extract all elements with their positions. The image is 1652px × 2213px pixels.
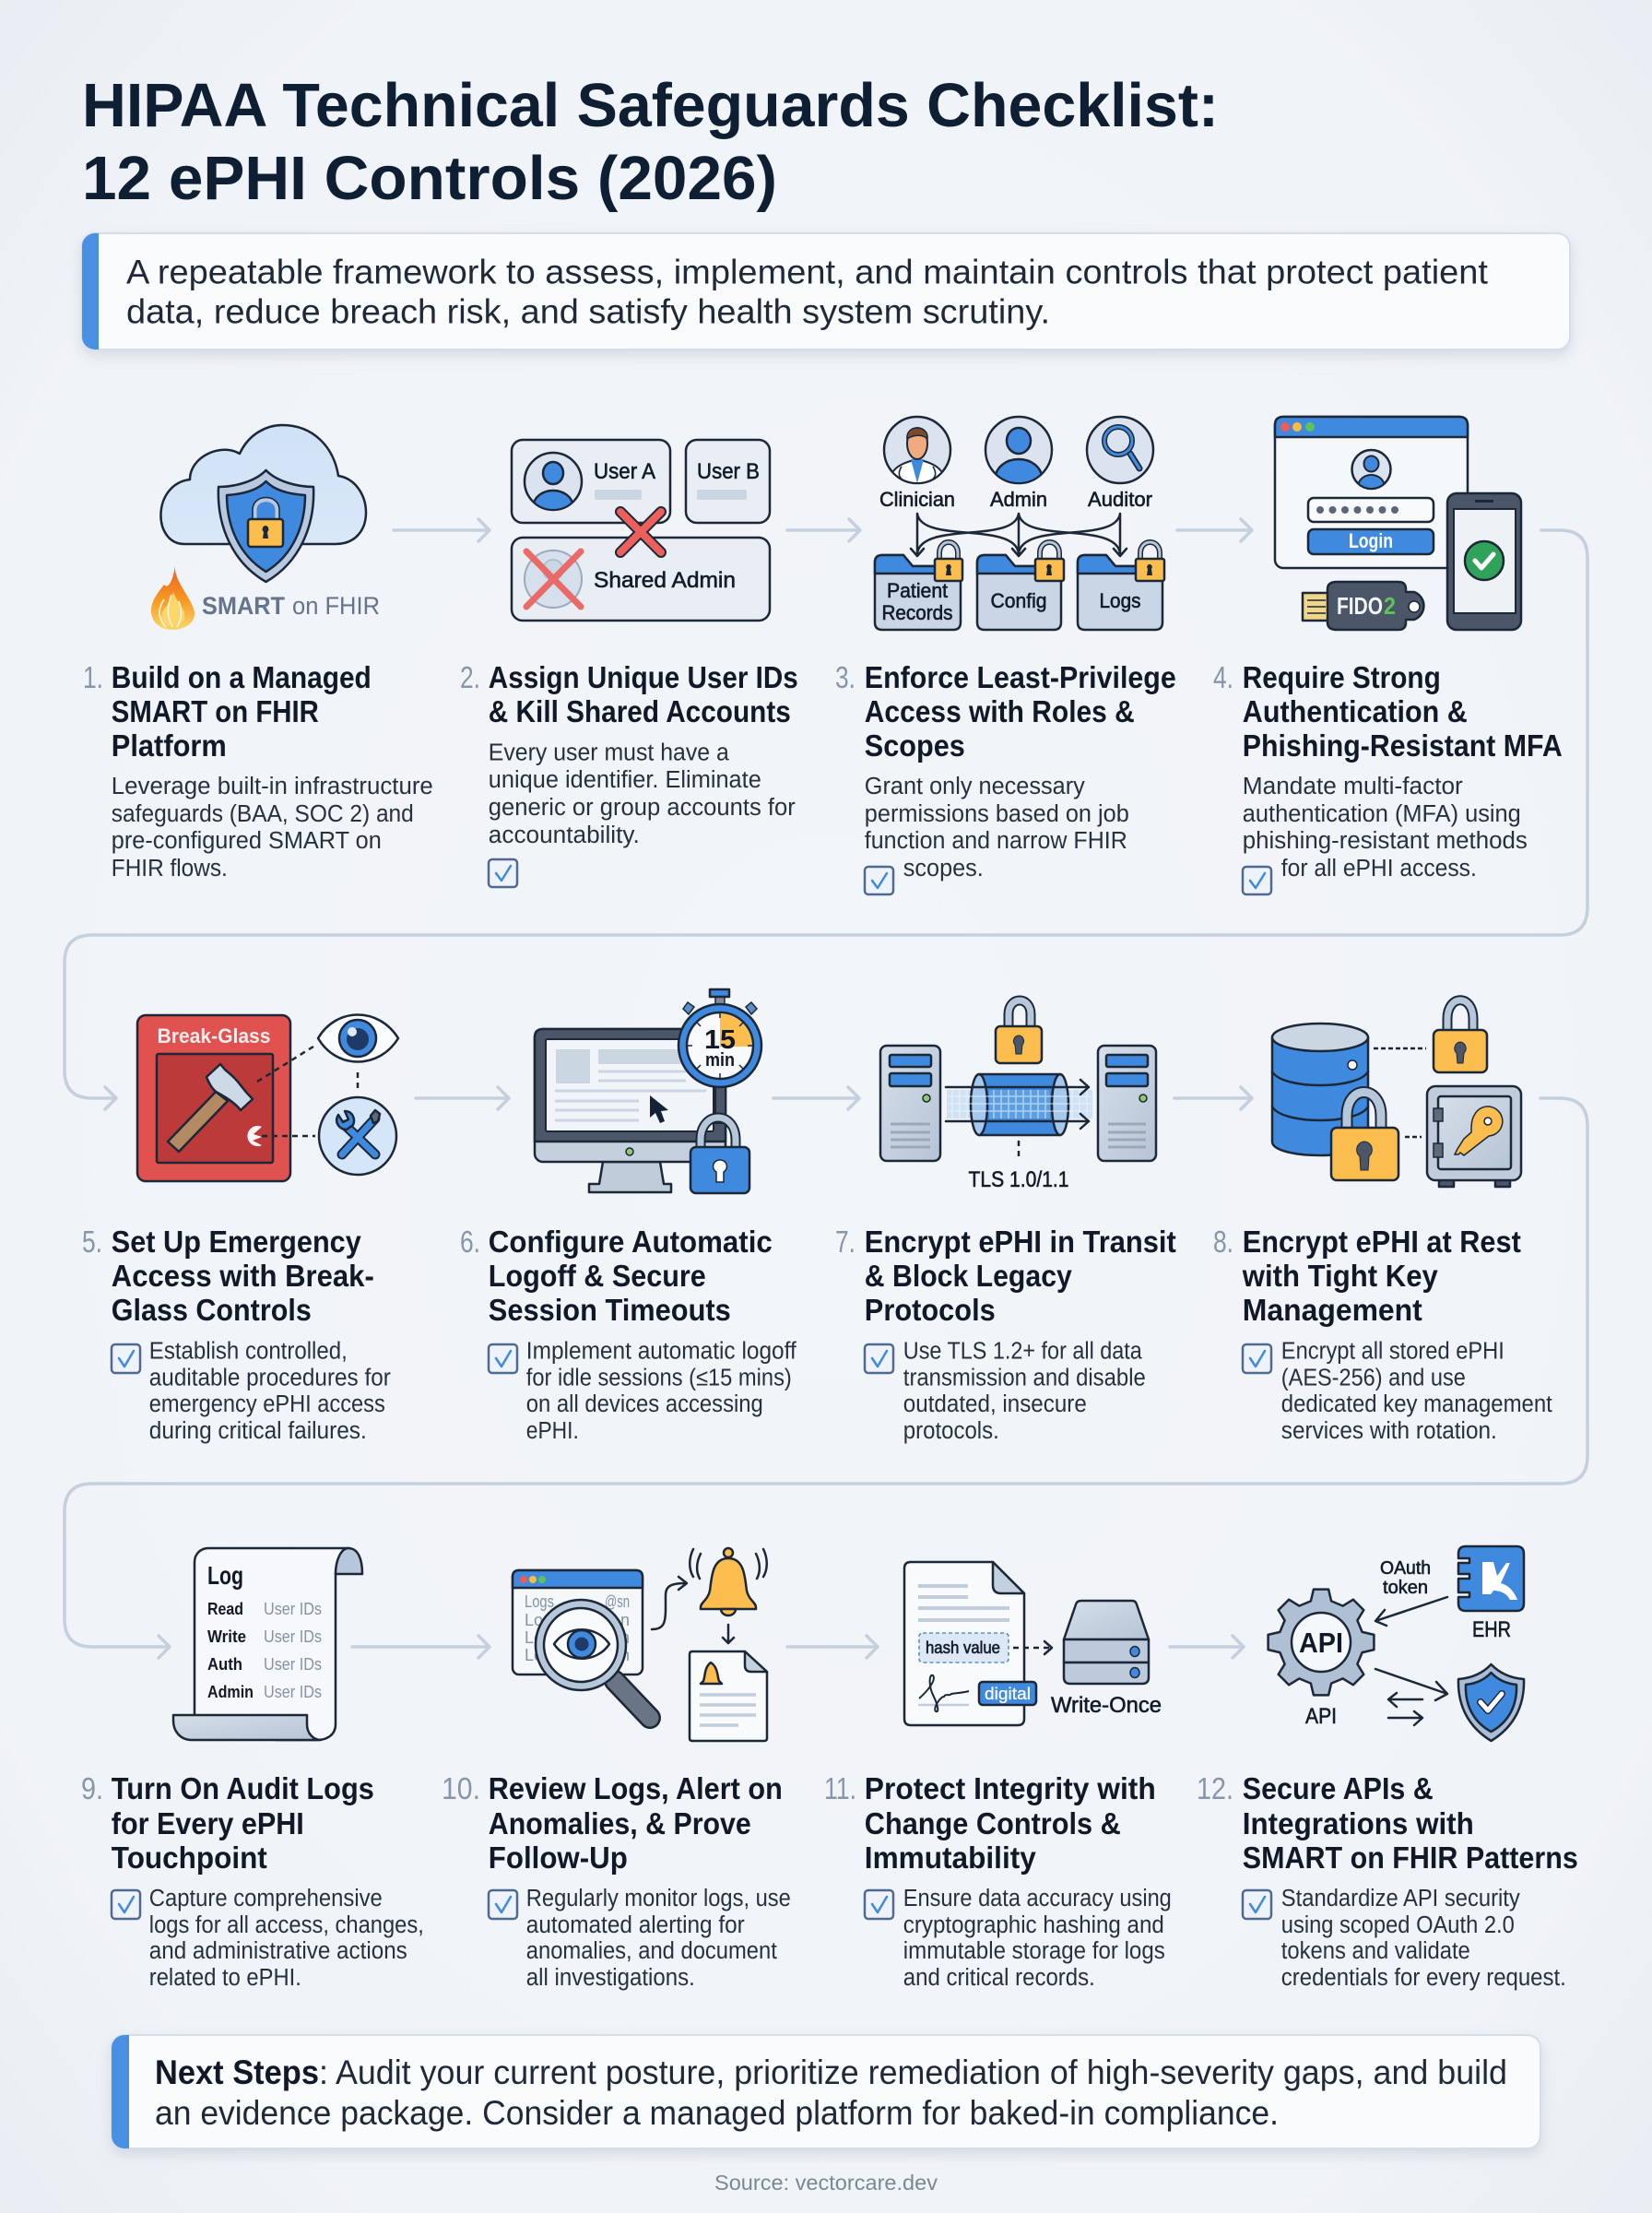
step 5 heading: Access with Break- xyxy=(112,1259,374,1293)
step 3 heading: Enforce Least-Privilege xyxy=(865,660,1176,694)
step 10 body xyxy=(489,1886,791,1991)
step 5 heading: 5. xyxy=(82,1225,102,1259)
icon: login window, phone approval and FIDO2 key xyxy=(1275,417,1521,630)
step 6 heading: 6. xyxy=(460,1225,480,1259)
icon: audit log scroll: User IDs xyxy=(264,1600,322,1618)
step 12 heading: SMART on FHIR Patterns xyxy=(1243,1840,1578,1875)
icon: log review magnifier, bell and alert document xyxy=(513,1548,767,1741)
icon: login window, phone approval and FIDO2 key: Login xyxy=(1349,529,1393,552)
step 4 heading: Phishing-Resistant MFA xyxy=(1243,728,1563,763)
step 2 heading: & Kill Shared Accounts xyxy=(489,694,791,728)
step 3 heading xyxy=(835,660,1176,763)
icon: user accounts and shared admin crossed out: User A xyxy=(594,459,655,484)
step 8 body: dedicated key management xyxy=(1281,1391,1552,1417)
step 10 body: all investigations. xyxy=(526,1965,695,1991)
step 11 heading xyxy=(824,1771,1156,1875)
step 11 heading: Immutability xyxy=(865,1840,1036,1875)
icon: roles mapped to locked folders: Admin xyxy=(990,488,1047,511)
icon: roles mapped to locked folders: Logs xyxy=(1099,589,1141,612)
step 6 heading xyxy=(460,1225,773,1327)
icon: log review magnifier, bell and alert document: n xyxy=(620,1646,630,1664)
step 8 heading: 8. xyxy=(1213,1225,1233,1259)
step 1 heading xyxy=(83,660,372,763)
panel: intro callout: A repeatable framework to assess, implement, and maintain controls that protect patient xyxy=(126,253,1489,291)
step 2 body: accountability. xyxy=(489,822,640,848)
step 3 body xyxy=(865,774,1129,894)
step 7 heading: & Block Legacy xyxy=(865,1259,1072,1293)
panel: step 8 xyxy=(1213,1000,1552,1444)
icon: user accounts and shared admin crossed out xyxy=(512,440,770,621)
step 6 body xyxy=(489,1339,797,1444)
step 11 body xyxy=(865,1886,1172,1991)
icon: monitor with stopwatch and lock: 15 xyxy=(704,1025,736,1055)
step 7 body: Use TLS 1.2+ for all data xyxy=(903,1339,1143,1365)
icon: log review magnifier, bell and alert document: @sn xyxy=(605,1592,630,1611)
panel: step 12 xyxy=(1197,1546,1578,1991)
icon: audit log scroll: Auth xyxy=(207,1655,242,1674)
panel: next steps callout xyxy=(112,2035,1540,2148)
flow connectors xyxy=(65,519,1587,1658)
step 9 heading: Turn On Audit Logs xyxy=(112,1771,374,1805)
step 9 body: and administrative actions xyxy=(149,1938,407,1964)
step 1 body xyxy=(112,774,433,882)
step 2 heading: Assign Unique User IDs xyxy=(489,660,798,694)
icon: monitor with stopwatch and lock: min xyxy=(705,1050,735,1071)
step 4 body xyxy=(1243,774,1528,894)
icon: monitor with stopwatch and lock xyxy=(535,989,761,1193)
step 10 heading: Follow-Up xyxy=(489,1840,628,1875)
step 1 body: safeguards (BAA, SOC 2) and xyxy=(112,801,414,827)
step 2 body xyxy=(489,740,796,887)
step 4 body: phishing-resistant methods xyxy=(1243,828,1528,854)
icon: audit log scroll: Log xyxy=(207,1561,243,1590)
step 3 heading: Access with Roles & xyxy=(865,694,1135,728)
icon: cloud shield with SMART on FHIR: on FHIR xyxy=(292,592,380,620)
step 1 body: FHIR flows. xyxy=(112,856,228,882)
step 12 body: Standardize API security xyxy=(1281,1886,1520,1911)
icon: log review magnifier, bell and alert document: Lo xyxy=(525,1646,543,1664)
icon: roles mapped to locked folders: Config xyxy=(990,589,1047,612)
step 5 heading: Set Up Emergency xyxy=(112,1225,361,1259)
step 6 body: on all devices accessing xyxy=(526,1391,763,1417)
step 1 heading: Build on a Managed xyxy=(112,660,372,694)
step 4 body: for all ePHI access. xyxy=(1281,856,1477,882)
step 8 body: (AES-256) and use xyxy=(1281,1365,1466,1391)
step 9 body: related to ePHI. xyxy=(149,1965,301,1991)
icon: roles mapped to locked folders: Records xyxy=(881,601,953,624)
step 9 heading: 9. xyxy=(81,1771,103,1805)
step 9 body: Capture comprehensive xyxy=(149,1886,383,1911)
step 1 heading: SMART on FHIR xyxy=(112,694,319,728)
panel: next steps callout: : Audit your current posture, prioritize remediation of high-severity gaps, and build xyxy=(319,2053,1507,2091)
step 9 heading: for Every ePHI xyxy=(112,1806,304,1840)
step 9 heading: Touchpoint xyxy=(112,1840,267,1875)
panel: step 3 xyxy=(835,417,1176,894)
step 10 body: automated alerting for xyxy=(526,1912,745,1938)
step 7 heading: Protocols xyxy=(865,1293,996,1327)
icon: break-glass box with eye and tools xyxy=(137,1014,398,1181)
step 7 body xyxy=(865,1339,1146,1444)
panel: step 11 xyxy=(824,1562,1172,1991)
step 11 heading: Protect Integrity with xyxy=(865,1771,1156,1805)
step 2 body: Every user must have a xyxy=(489,740,730,765)
step 11 heading: 11. xyxy=(824,1771,856,1805)
step 10 heading: Anomalies, & Prove xyxy=(489,1806,751,1840)
icon: database, locks and key safe xyxy=(1272,1000,1521,1187)
icon: hashed signed document and write-once storage: digital xyxy=(985,1685,1031,1703)
panel: next steps callout: Next Steps xyxy=(155,2053,319,2091)
step 8 heading: Encrypt ePHI at Rest xyxy=(1243,1225,1521,1259)
step 9 body xyxy=(112,1886,424,1991)
step 2 heading xyxy=(460,660,798,728)
panel: step 6 xyxy=(460,989,797,1444)
step 11 body: Ensure data accuracy using xyxy=(903,1886,1172,1911)
step 10 body: Regularly monitor logs, use xyxy=(526,1886,791,1911)
step 3 body: scopes. xyxy=(903,856,984,882)
source footer: Source: vectorcare.dev xyxy=(714,2171,938,2195)
step 7 body: protocols. xyxy=(903,1418,999,1444)
step 5 body: emergency ePHI access xyxy=(149,1391,385,1417)
step 1 heading: 1. xyxy=(83,660,103,694)
step 6 heading: Configure Automatic xyxy=(489,1225,773,1259)
panel: step 10 xyxy=(442,1548,791,1991)
title xyxy=(82,71,1219,213)
panel: next steps callout: an evidence package. Consider a managed platform for baked-in compliance. xyxy=(155,2094,1279,2132)
step 6 body: for idle sessions (≤15 mins) xyxy=(526,1365,792,1391)
panel: step 4 xyxy=(1213,417,1563,894)
title: HIPAA Technical Safeguards Checklist: xyxy=(82,71,1219,140)
icon: API gear, OAuth token, EHR and shield xyxy=(1268,1546,1524,1741)
step 5 body: during critical failures. xyxy=(149,1418,367,1444)
icon: audit log scroll: User IDs xyxy=(264,1627,322,1646)
step 12 heading: Integrations with xyxy=(1243,1806,1474,1840)
step 1 body: pre-configured SMART on xyxy=(112,828,382,854)
icon: user accounts and shared admin crossed out: Shared Admin xyxy=(594,568,736,593)
step 3 heading: 3. xyxy=(835,660,856,694)
icon: servers with encrypted tunnel and lock xyxy=(880,1000,1156,1192)
step 4 heading: Authentication & xyxy=(1243,694,1468,728)
panel: step 7 xyxy=(835,1000,1176,1444)
step 7 body: transmission and disable xyxy=(903,1365,1146,1391)
step 3 heading: Scopes xyxy=(865,728,965,763)
icon: audit log scroll: Read xyxy=(207,1600,243,1618)
step 3 body: Grant only necessary xyxy=(865,774,1085,799)
step 12 heading: 12. xyxy=(1197,1771,1233,1805)
step 7 body: outdated, insecure xyxy=(903,1391,1087,1417)
panel: step 9 xyxy=(81,1548,424,1991)
icon: audit log scroll: User IDs xyxy=(264,1683,322,1701)
step 7 heading: Encrypt ePHI in Transit xyxy=(865,1225,1176,1259)
step 8 heading xyxy=(1213,1225,1521,1327)
step 2 heading: 2. xyxy=(460,660,480,694)
icon: API gear, OAuth token, EHR and shield: OAuth xyxy=(1380,1558,1431,1579)
icon: audit log scroll: Admin xyxy=(207,1683,254,1701)
icon: audit log scroll: Write xyxy=(207,1627,246,1646)
icon: hashed signed document and write-once storage xyxy=(904,1562,1162,1725)
step 6 heading: Logoff & Secure xyxy=(489,1259,706,1293)
step 8 body: services with rotation. xyxy=(1281,1418,1497,1444)
step 12 heading xyxy=(1197,1771,1578,1875)
step 3 body: permissions based on job xyxy=(865,801,1129,827)
step 10 heading: 10. xyxy=(442,1771,480,1805)
icon: log review magnifier, bell and alert document: Lo xyxy=(525,1628,543,1647)
step 11 body: cryptographic hashing and xyxy=(903,1912,1164,1938)
icon: log review magnifier, bell and alert document: Lo xyxy=(525,1611,543,1629)
step 8 heading: Management xyxy=(1243,1293,1422,1327)
icon: hashed signed document and write-once storage: Write-Once xyxy=(1051,1693,1162,1718)
icon: break-glass box with eye and tools: Break-Glass xyxy=(157,1024,271,1047)
step 12 body: using scoped OAuth 2.0 xyxy=(1281,1912,1515,1938)
panel: intro callout: data, reduce breach risk, and satisfy health system scrutiny. xyxy=(126,293,1050,330)
icon: audit log scroll: User IDs xyxy=(264,1655,322,1674)
icon: API gear, OAuth token, EHR and shield: API xyxy=(1299,1627,1343,1659)
icon: hashed signed document and write-once storage: hash value xyxy=(926,1639,1000,1657)
icon: roles mapped to locked folders: Auditor xyxy=(1088,488,1152,511)
step 5 heading: Glass Controls xyxy=(112,1293,312,1327)
icon: audit log scroll xyxy=(173,1548,362,1740)
icon: API gear, OAuth token, EHR and shield: EHR xyxy=(1472,1617,1511,1642)
panel: step 2 xyxy=(460,440,798,887)
step 11 body: and critical records. xyxy=(903,1965,1095,1991)
icon: login window, phone approval and FIDO2 key: FIDO xyxy=(1337,592,1383,620)
icon: log review magnifier, bell and alert document: n xyxy=(620,1611,630,1629)
step 2 body: generic or group accounts for xyxy=(489,795,796,821)
icon: API gear, OAuth token, EHR and shield: token xyxy=(1383,1578,1428,1598)
step 4 heading: Require Strong xyxy=(1243,660,1441,694)
step 12 body: tokens and validate xyxy=(1281,1938,1470,1964)
step 4 heading xyxy=(1213,660,1563,763)
step 6 body: ePHI. xyxy=(526,1418,579,1444)
step 9 heading xyxy=(81,1771,374,1875)
panel: intro callout xyxy=(82,233,1570,349)
step 5 body: auditable procedures for xyxy=(149,1365,391,1391)
step 4 body: authentication (MFA) using xyxy=(1243,801,1521,827)
icon: log review magnifier, bell and alert document: Logs xyxy=(525,1592,554,1611)
step 5 body xyxy=(112,1339,391,1444)
step 8 body xyxy=(1243,1339,1552,1444)
icon: user accounts and shared admin crossed out: User B xyxy=(697,459,760,484)
icon: login window, phone approval and FIDO2 key: 2 xyxy=(1384,592,1396,620)
step 2 body: unique identifier. Eliminate xyxy=(489,767,761,793)
step 6 heading: Session Timeouts xyxy=(489,1293,731,1327)
step 7 heading xyxy=(835,1225,1176,1327)
icon: API gear, OAuth token, EHR and shield: API xyxy=(1305,1704,1337,1729)
step 8 heading: with Tight Key xyxy=(1242,1259,1438,1293)
icon: log review magnifier, bell and alert document: n xyxy=(620,1628,630,1647)
step 12 body: credentials for every request. xyxy=(1281,1965,1566,1991)
step 1 heading: Platform xyxy=(112,728,227,763)
panel: step 1 xyxy=(83,425,433,882)
step 10 heading xyxy=(442,1771,783,1875)
step 3 body: function and narrow FHIR xyxy=(865,828,1127,854)
step 11 heading: Change Controls & xyxy=(865,1806,1121,1840)
step 5 body: Establish controlled, xyxy=(149,1339,348,1365)
icon: roles mapped to locked folders: Clinician xyxy=(879,488,955,511)
step 11 body: immutable storage for logs xyxy=(903,1938,1165,1964)
step 6 body: Implement automatic logoff xyxy=(526,1339,797,1365)
step 9 body: logs for all access, changes, xyxy=(149,1912,424,1938)
step 5 heading xyxy=(82,1225,374,1327)
step 4 body: Mandate multi-factor xyxy=(1243,774,1463,799)
icon: roles mapped to locked folders: Patient xyxy=(887,579,948,602)
step 1 body: Leverage built-in infrastructure xyxy=(112,774,433,799)
step 12 heading: Secure APIs & xyxy=(1243,1771,1434,1805)
icon: roles mapped to locked folders xyxy=(875,417,1164,630)
step 7 heading: 7. xyxy=(835,1225,856,1259)
icon: cloud shield with SMART on FHIR xyxy=(151,425,380,630)
icon: cloud shield with SMART on FHIR: SMART xyxy=(202,592,285,620)
step 10 body: anomalies, and document xyxy=(526,1938,777,1964)
step 8 body: Encrypt all stored ePHI xyxy=(1281,1339,1504,1365)
panel: step 5 xyxy=(82,1014,398,1444)
icon: servers with encrypted tunnel and lock: TLS 1.0/1.1 xyxy=(968,1167,1069,1192)
step 10 heading: Review Logs, Alert on xyxy=(489,1771,783,1805)
step 4 heading: 4. xyxy=(1213,660,1233,694)
step 12 body xyxy=(1243,1886,1566,1991)
title: 12 ePHI Controls (2026) xyxy=(82,144,777,213)
